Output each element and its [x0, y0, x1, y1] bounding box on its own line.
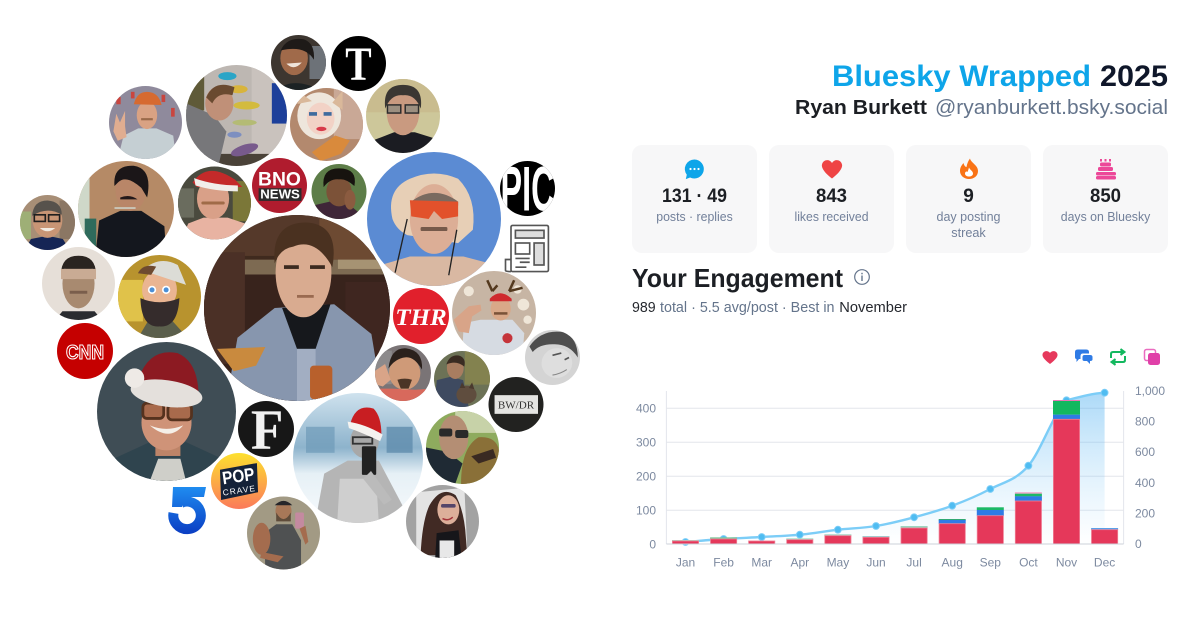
- avatar: smiling man with glasses, small: [20, 195, 75, 250]
- month labels: Mar: [751, 556, 772, 570]
- icon: replies bubbles: [1075, 350, 1092, 364]
- stat label: posts · replies: [656, 209, 733, 224]
- avatar: shirtless man winter santa: [293, 393, 423, 523]
- left y axis labels: 400: [636, 402, 656, 416]
- avatar: Forbes F logo: F: [251, 399, 283, 462]
- right y axis labels: 0: [1135, 537, 1142, 551]
- right y axis labels: 800: [1135, 414, 1155, 428]
- icon: flame: [960, 158, 978, 179]
- avatar: CNN logo: [57, 323, 113, 379]
- avatar: grey portrait sketch: [525, 330, 580, 385]
- engagement summary: [632, 300, 907, 316]
- avatar: bald man with sunglasses and dog: [426, 411, 499, 484]
- engagement summary: total · 5.5 avg/post · Best in: [660, 300, 834, 316]
- avatar: main large portrait with pizza and can: [204, 215, 390, 401]
- user name and handle: Ryan Burkett: [795, 97, 927, 119]
- month labels: Aug: [942, 556, 963, 570]
- avatar: man with colourful wall hooks: [186, 65, 287, 166]
- icon: info: [855, 270, 869, 284]
- avatar: man in sun hat on blue sky: [367, 152, 501, 286]
- left y axis labels: 0: [649, 538, 656, 552]
- panel: days on Bluesky: [1043, 145, 1168, 253]
- avatar: CNN logo: CNN: [66, 342, 104, 364]
- left y axis labels: 300: [636, 436, 656, 450]
- chart legend icons: [1042, 349, 1160, 365]
- heading: your engagement: Your Engagement: [632, 263, 843, 293]
- left y axis labels: 200: [636, 470, 656, 484]
- stat value: 843: [816, 186, 847, 207]
- panel: posts and replies: [632, 145, 757, 253]
- month labels: Apr: [790, 556, 809, 570]
- avatar: The Hollywood Reporter logo: [393, 288, 449, 344]
- stat label second line: streak: [951, 225, 986, 240]
- month labels: Jan: [676, 556, 695, 570]
- panel: day posting streak: [906, 145, 1031, 253]
- stat label: likes received: [794, 209, 868, 224]
- icon: cake: [1096, 159, 1116, 180]
- avatar: man with glasses: [366, 79, 440, 153]
- avatar bubble cluster: [20, 35, 580, 570]
- combo chart: monthly engagement: [636, 384, 1165, 570]
- stat value: 850: [1090, 186, 1121, 207]
- avatar: man in santa hat and apron: [178, 166, 251, 240]
- avatar: Forbes F logo: [238, 401, 294, 457]
- avatar: channel 5 logo: [168, 487, 206, 534]
- avatar: The Hollywood Reporter logo: THR: [395, 305, 447, 331]
- month labels: Sep: [980, 556, 1001, 570]
- icon: quotes squares: [1144, 350, 1160, 365]
- right y axis labels: 400: [1135, 476, 1155, 490]
- month labels: May: [827, 556, 849, 570]
- avatar: man with dog in garden: [434, 351, 490, 407]
- stacked bars: [672, 400, 1118, 544]
- right y axis labels: [1135, 384, 1165, 551]
- stat value: 131 · 49: [662, 186, 727, 207]
- x axis line: [666, 543, 1124, 545]
- avatar: man with orange cap: [109, 86, 182, 159]
- left y axis labels: [636, 402, 656, 552]
- stat label: day posting: [936, 209, 1000, 224]
- avatar: newspaper icon: [504, 224, 550, 272]
- month labels: Jun: [866, 556, 886, 570]
- right y axis labels: 200: [1135, 506, 1155, 520]
- avatar: New York Times logo: T: [345, 39, 372, 91]
- avatar: muscular man mirror selfie: [247, 496, 320, 570]
- right y axis labels: 1,000: [1135, 384, 1165, 398]
- user name and handle: @ryanburkett.bsky.social: [935, 97, 1168, 119]
- avatar: man with antlers flexing: [452, 271, 536, 355]
- right y axis labels: 600: [1135, 445, 1155, 459]
- icon: chat bubble: [685, 159, 704, 179]
- panel: likes received: [769, 145, 894, 253]
- avatar: man with censored eyes: [42, 247, 115, 320]
- avatar: cartoon bearded man in cap: [118, 255, 201, 338]
- cumulative line: [686, 393, 1105, 542]
- engagement summary: November: [839, 300, 907, 316]
- icon: heart: [822, 160, 842, 178]
- stat value: 9: [963, 186, 974, 207]
- icon: likes heart: [1042, 351, 1058, 364]
- avatar: Pop Crave logo: CRAVE: [222, 483, 256, 498]
- month labels: [676, 556, 1115, 570]
- cumulative area: [686, 393, 1105, 544]
- left y axis labels: 100: [636, 504, 656, 518]
- month labels: Feb: [713, 556, 734, 570]
- title: Bluesky Wrapped: [832, 60, 1091, 93]
- avatar: BNO News logo: BNO: [258, 168, 301, 190]
- avatar: laughing man in santa hat: [97, 342, 236, 481]
- replies, reposts and quotes segments: [672, 400, 1118, 541]
- user name and handle: [795, 97, 1168, 119]
- title: 2025: [1100, 60, 1168, 93]
- avatar: man with moustache and black shirt: [78, 161, 174, 257]
- icon: reposts arrows: [1111, 349, 1125, 365]
- avatar: curly-haired man: [312, 164, 366, 219]
- cumulative points: [682, 389, 1108, 545]
- avatar: Pop Crave logo: POP: [221, 464, 256, 488]
- engagement summary: 989: [632, 300, 656, 316]
- avatar: BW/DR logo: BW/DR: [498, 399, 535, 411]
- likes segments: [672, 419, 1118, 544]
- month labels: Oct: [1019, 556, 1038, 570]
- month labels: Jul: [906, 556, 922, 570]
- avatar: BW/DR logo: [488, 377, 544, 432]
- month labels: Nov: [1056, 556, 1077, 570]
- gridlines: [666, 391, 1124, 544]
- avatar: BNO News logo: NEWS: [260, 188, 300, 202]
- avatar: Pop Crave logo: [211, 453, 267, 509]
- avatar: woman with long hair and glasses: [406, 485, 479, 558]
- stat label: days on Bluesky: [1061, 209, 1151, 224]
- avatar: New York Times logo: [331, 36, 386, 91]
- avatar: cat face filter: [290, 88, 363, 161]
- month labels: Dec: [1094, 556, 1115, 570]
- avatar: BNO News logo: [252, 158, 307, 213]
- avatar: smiling person, dark background: [271, 35, 326, 90]
- avatar: man lying on pillow: [375, 345, 431, 401]
